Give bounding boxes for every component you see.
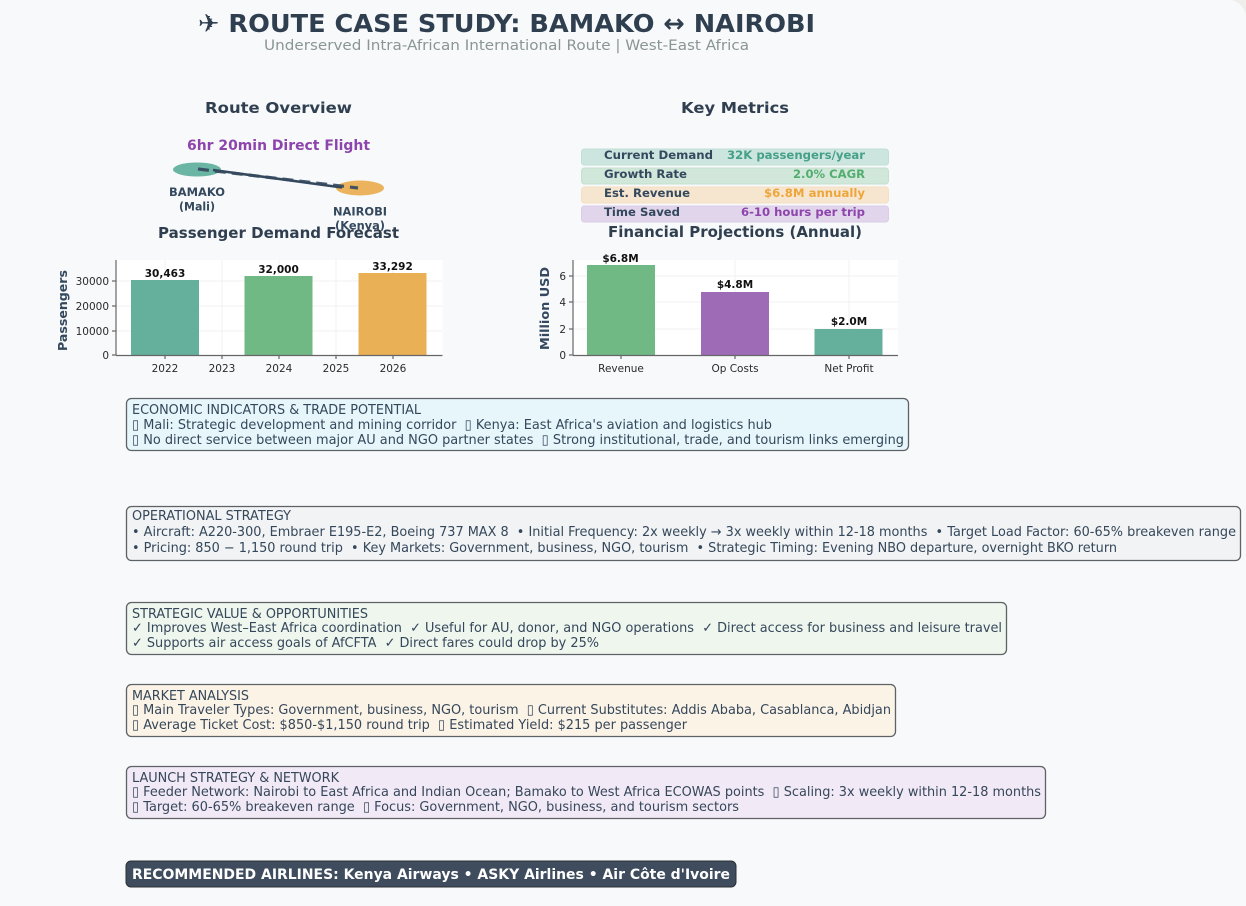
panel: operational strategy: • Pricing: 850 − 1,150 round trip • Key Markets: Government, business, NGO, tourism • Strategic Timing: Evening NBO departure, overnight BKO return — [132, 541, 1117, 556]
y axis title: Million USD — [537, 267, 552, 350]
heading: key metrics: Key Metrics — [681, 99, 789, 117]
panel: launch strategy: ▯ Feeder Network: Nairobi to East Africa and Indian Ocean; Bamako to West Africa ECOWAS points ▯ Scaling: 3x weekly within 12-18 months — [132, 785, 1041, 800]
x axis labels: 2026 — [380, 363, 407, 375]
x axis labels: 2023 — [209, 363, 235, 375]
panel: key metrics — [582, 99, 888, 222]
x axis labels: 2022 — [152, 363, 178, 375]
label: Nairobi: NAIROBI — [333, 204, 387, 218]
panel: strategic value: ✓ Improves West–East Africa coordination ✓ Useful for AU, donor, and NGO operations ✓ Direct access for business and leisure travel — [132, 621, 1002, 636]
chart: passenger demand forecast — [55, 224, 442, 375]
panel: strategic value — [126, 602, 1006, 654]
bar values: 30,463 — [145, 268, 185, 280]
title: ✈ ROUTE CASE STUDY: BAMAKO ↔ NAIROBI — [198, 9, 815, 38]
callout: recommended airlines — [126, 861, 736, 887]
panel: market analysis: ▯ Main Traveler Types: Government, business, NGO, tourism ▯ Current Substitutes: Addis Ababa, Casablanca, Abidjan — [132, 703, 891, 718]
metric: growth rate — [582, 167, 888, 184]
label: Nairobi — [333, 204, 387, 232]
label: Bamako: BAMAKO — [169, 185, 225, 199]
panel: strategic value: STRATEGIC VALUE & OPPORTUNITIES — [132, 607, 368, 622]
panel: route overview — [169, 99, 387, 232]
metric: estimated revenue: $6.8M annually — [764, 186, 865, 200]
bar values: 32,000 — [258, 264, 299, 276]
marker: Bamako — [173, 162, 221, 176]
x axis labels: 2024 — [266, 363, 293, 375]
arrow: route line — [198, 169, 358, 188]
panel: economic indicators — [126, 398, 908, 450]
metric: growth rate: Growth Rate — [604, 167, 687, 181]
bar: operating costs — [701, 292, 769, 355]
y axis title: Passengers — [55, 270, 70, 351]
x axis labels: 2025 — [323, 363, 349, 375]
label: Bamako — [169, 185, 225, 214]
x axis labels — [598, 363, 874, 375]
metric: current demand — [582, 148, 888, 165]
bar: net profit — [814, 329, 882, 355]
panel: market analysis: ▯ Average Ticket Cost: $850-$1,150 round trip ▯ Estimated Yield: $215 per passenger — [132, 718, 687, 733]
y axis labels: 20000 — [76, 301, 109, 313]
subtitle: Underserved Intra-African International Route | West-East Africa — [264, 38, 749, 54]
panel: strategic value: ✓ Supports air access goals of AfCFTA ✓ Direct fares could drop by 25% — [132, 636, 599, 651]
y axis labels: 0 — [102, 350, 109, 362]
panel: economic indicators: ▯ No direct service between major AU and NGO partner states ▯ Strong institutional, trade, and tourism links emerging — [132, 433, 904, 448]
bar values: 33,292 — [372, 261, 413, 273]
metric: growth rate: 2.0% CAGR — [793, 167, 865, 181]
callout: recommended airlines: RECOMMENDED AIRLINES: Kenya Airways • ASKY Airlines • Air Côte d'Ivoire — [132, 867, 730, 883]
y axis labels: 4 — [559, 297, 566, 309]
y axis labels: 6 — [559, 271, 566, 283]
heading: route overview: Route Overview — [205, 99, 352, 117]
x axis labels: Op Costs — [711, 363, 759, 375]
metric: estimated revenue: Est. Revenue — [604, 186, 690, 200]
y axis labels: 0 — [559, 350, 566, 362]
bar: revenue — [587, 265, 655, 355]
x axis labels: Net Profit — [824, 363, 874, 375]
y axis labels — [559, 271, 566, 362]
panel: operational strategy — [126, 506, 1240, 560]
marker: Nairobi — [336, 180, 384, 196]
panel: market analysis — [126, 684, 896, 736]
panel: economic indicators: ECONOMIC INDICATORS & TRADE POTENTIAL — [132, 403, 422, 418]
label: Nairobi: (Kenya) — [335, 218, 385, 232]
panel: economic indicators: ▯ Mali: Strategic development and mining corridor ▯ Kenya: East Africa's aviation and logistics hub — [132, 418, 772, 433]
panel: launch strategy: ▯ Target: 60-65% breakeven range ▯ Focus: Government, NGO, business, and tourism sectors — [132, 800, 739, 815]
heading: passenger demand forecast: Passenger Demand Forecast — [158, 224, 399, 242]
y axis labels: 10000 — [76, 326, 109, 338]
metric: time saved — [582, 205, 888, 222]
label: Bamako: (Mali) — [179, 200, 215, 214]
chart: financial projections — [537, 223, 898, 375]
metric: time saved: Time Saved — [604, 205, 680, 219]
y axis labels — [76, 276, 109, 362]
bar values: $4.8M — [717, 279, 753, 291]
y axis labels: 2 — [559, 324, 566, 336]
flight duration: 6hr 20min Direct Flight — [187, 138, 370, 154]
bar values — [602, 253, 867, 328]
panel: launch strategy — [126, 766, 1046, 818]
panel: market analysis: MARKET ANALYSIS — [132, 689, 249, 704]
bar: 2024 — [244, 276, 312, 355]
bar values: $2.0M — [831, 316, 867, 328]
bar values: $6.8M — [602, 253, 639, 265]
y axis labels: 30000 — [76, 276, 109, 288]
bar: 2022 — [131, 280, 199, 355]
panel: operational strategy: OPERATIONAL STRATEGY — [132, 509, 292, 524]
metric: current demand: 32K passengers/year — [727, 148, 865, 162]
metric: estimated revenue — [582, 186, 888, 203]
x axis labels — [152, 363, 407, 375]
heading: financial projections: Financial Projections (Annual) — [608, 223, 862, 241]
panel: launch strategy: LAUNCH STRATEGY & NETWORK — [132, 771, 340, 786]
bar values — [145, 261, 413, 280]
metric: time saved: 6-10 hours per trip — [741, 205, 865, 219]
metric: current demand: Current Demand — [604, 148, 713, 162]
x axis labels: Revenue — [598, 363, 644, 375]
bar: 2026 — [358, 273, 426, 355]
